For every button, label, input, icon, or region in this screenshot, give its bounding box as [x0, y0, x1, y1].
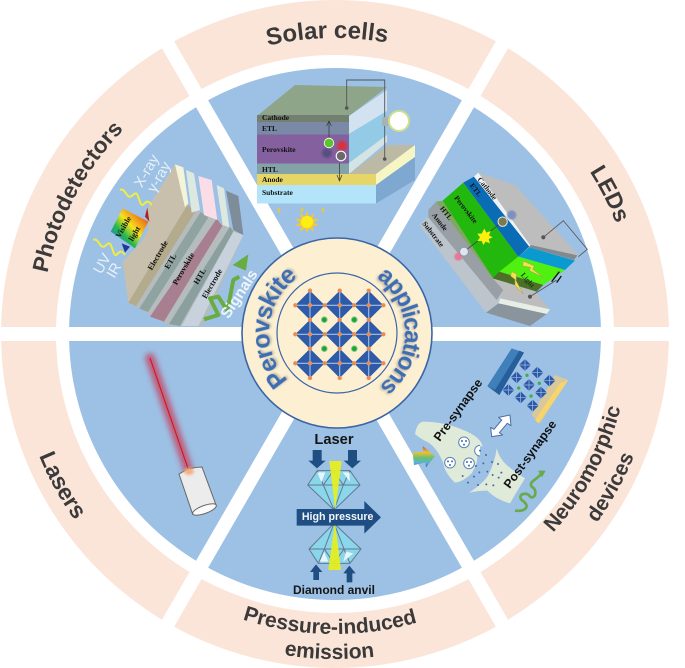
icon: sun	[277, 207, 325, 233]
icon: light bolts	[511, 261, 543, 294]
icon: spectrum: light	[127, 224, 142, 243]
icon: signal wave	[515, 471, 546, 511]
heading: Solar cells: Solar cells	[266, 22, 388, 44]
icon: lower diamond	[309, 523, 361, 563]
icon: spectrum	[111, 207, 149, 253]
layer labels: HTL	[438, 204, 455, 222]
post-synapse	[469, 448, 525, 503]
layer labels: ETL	[163, 252, 178, 271]
label: Laser: Laser	[314, 432, 354, 448]
label: Light: Light	[519, 271, 537, 290]
icon: incoming radiation	[93, 189, 152, 255]
layer labels: ETL	[468, 181, 484, 198]
layer labels: Cathode	[262, 113, 290, 122]
arrows: laser direction	[308, 450, 361, 582]
memristor device	[487, 348, 568, 423]
label: Post-synapse: Post-synapse	[501, 418, 559, 491]
heading: Neuromorphic devices: devices	[589, 454, 633, 521]
heading: Photodetectors: Photodetectors	[32, 124, 122, 272]
icon: double arrow	[491, 415, 511, 437]
radiation labels	[91, 152, 175, 281]
heading: Pressure-induced emission: Pressure-induced	[244, 606, 416, 634]
label: Diamond anvil: Diamond anvil	[293, 583, 375, 597]
title: Perovskite: Perovskite	[255, 268, 298, 390]
layer labels: HTL	[262, 165, 278, 174]
wires	[347, 80, 385, 159]
arrow: High pressure	[297, 501, 381, 534]
pre-synapse	[415, 422, 483, 483]
panel: central perovskite circle	[241, 237, 433, 429]
illustration: LED stack	[419, 173, 587, 326]
icon: spectrum: Visible	[114, 214, 133, 239]
layer labels: Electrode	[200, 267, 224, 300]
title: applications: applications	[376, 270, 420, 396]
arrow: High pressure: High pressure	[302, 511, 374, 523]
illustration: diamond anvil cell	[293, 432, 381, 597]
charge carriers	[322, 121, 347, 181]
layer labels: Cathode	[476, 175, 499, 202]
illustration: photodetector stack	[91, 152, 262, 326]
layer labels: Anode	[262, 175, 284, 184]
icon: crystal lattice	[293, 289, 385, 380]
layer labels: ETL	[262, 124, 277, 133]
layer labels	[146, 239, 224, 300]
layer labels: Perovskite	[262, 145, 296, 154]
icon: upper diamond	[308, 471, 360, 510]
wires	[528, 221, 587, 298]
layer labels: Substrate	[420, 219, 447, 249]
layer labels: Perovskite	[171, 251, 197, 286]
icon: rainbow arrow	[413, 446, 435, 467]
heading: Lasers: Lasers	[40, 450, 83, 518]
layer labels	[420, 175, 499, 249]
illustration: solar cell stack	[257, 80, 415, 233]
charge carriers and emission	[454, 210, 516, 261]
radiation labels: γ-ray	[144, 159, 175, 195]
heading: Neuromorphic devices: Neuromorphic	[543, 406, 620, 532]
illustration: laser	[150, 358, 218, 518]
illustration: neuromorphic synapse	[413, 348, 568, 511]
radiation labels: IR	[104, 260, 125, 281]
heading: LEDs: LEDs	[590, 164, 626, 222]
radiation labels: X-ray	[132, 152, 163, 191]
icon: signal arrow	[204, 254, 248, 319]
label: Signals: Signals	[218, 267, 262, 322]
panel: blue sectors	[69, 68, 601, 600]
icon: light bulb	[382, 111, 409, 131]
label: Pre-synapse: Pre-synapse	[431, 376, 485, 444]
layer labels: Anode	[430, 211, 450, 233]
layer labels: Electrode	[146, 239, 170, 272]
heading: Pressure-induced emission	[244, 606, 416, 660]
laser beam	[328, 461, 342, 570]
layer labels	[262, 113, 296, 197]
layer labels: Substrate	[262, 188, 294, 197]
layer labels: HTL	[192, 267, 208, 286]
icon: laser cylinder	[179, 467, 218, 518]
heading: Pressure-induced emission: emission	[286, 643, 374, 660]
radiation labels: UV	[91, 251, 115, 277]
layer labels: Perovskite	[452, 194, 480, 226]
neurotransmitters	[462, 450, 502, 486]
